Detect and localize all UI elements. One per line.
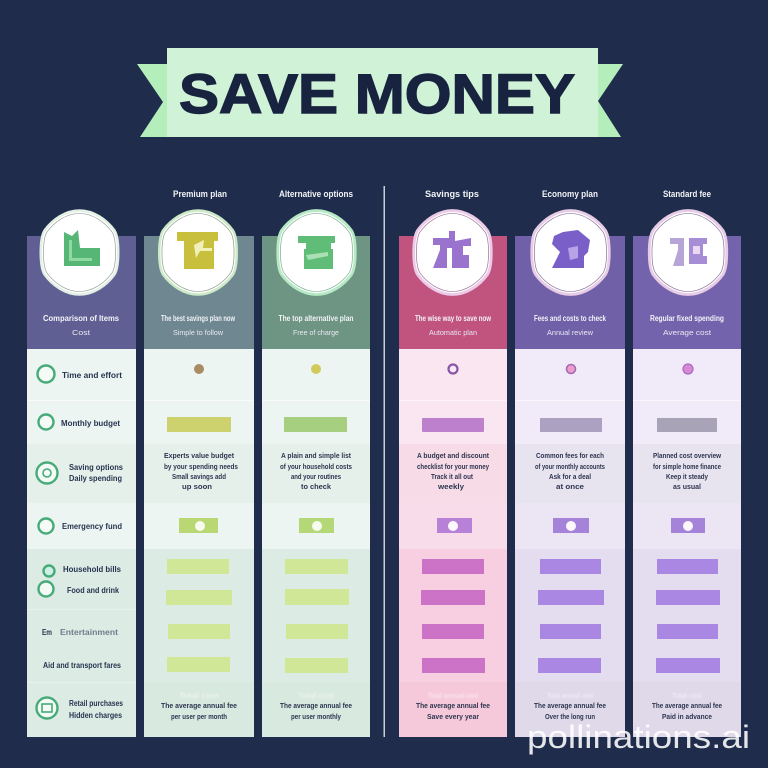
column labels: Alternative options bbox=[279, 189, 353, 199]
description: by your spending needs bbox=[164, 462, 238, 471]
indicator dot bbox=[448, 364, 458, 374]
title: SAVE MONEY bbox=[179, 62, 575, 125]
footer text: per user monthly bbox=[291, 712, 342, 721]
toggle bbox=[671, 518, 705, 533]
row labels: Household bills bbox=[63, 565, 122, 574]
header text: Annual review bbox=[547, 328, 594, 337]
body rows bbox=[515, 349, 625, 737]
footer text bbox=[280, 691, 352, 721]
bars bbox=[656, 559, 720, 673]
description: Track it all out bbox=[431, 472, 473, 481]
description: of your household costs bbox=[280, 462, 352, 471]
footer text bbox=[652, 691, 722, 721]
footer text: The average annual fee bbox=[652, 701, 722, 710]
description: Planned cost overview bbox=[653, 451, 721, 460]
body rows bbox=[633, 349, 741, 737]
description bbox=[535, 451, 605, 491]
toggle bbox=[553, 518, 589, 533]
footer text bbox=[416, 691, 490, 721]
row icons bbox=[36, 366, 58, 718]
header text bbox=[43, 314, 120, 337]
description: A plain and simple list bbox=[281, 451, 351, 460]
indicator dot bbox=[566, 364, 576, 374]
panel: alternatives plan bbox=[262, 210, 370, 737]
bar bbox=[540, 418, 602, 432]
description bbox=[417, 451, 490, 491]
description: A budget and discount bbox=[417, 451, 489, 460]
header text: Free of charge bbox=[293, 328, 339, 337]
description: for simple home finance bbox=[653, 462, 721, 471]
header text: Comparison of Items bbox=[43, 314, 120, 323]
description: up soon bbox=[182, 482, 212, 491]
panel: savings plan bbox=[399, 210, 507, 737]
row labels: Emergency fund bbox=[62, 522, 122, 531]
footer text: Total annual cost bbox=[547, 691, 594, 700]
footer text: The average annual fee bbox=[161, 701, 237, 710]
description: of your monthly accounts bbox=[535, 462, 605, 471]
row labels: Daily spending bbox=[69, 474, 122, 483]
header text: Regular fixed spending bbox=[650, 314, 724, 323]
header bbox=[262, 236, 370, 349]
footer text: The average annual fee bbox=[416, 701, 490, 710]
header bbox=[515, 236, 625, 349]
footer text: Total cost bbox=[179, 691, 220, 700]
header bbox=[144, 236, 254, 349]
toggle bbox=[179, 518, 218, 533]
header text bbox=[415, 314, 492, 337]
row labels: Monthly budget bbox=[61, 419, 120, 428]
indicator dot bbox=[683, 364, 693, 374]
column labels: Savings tips bbox=[425, 189, 479, 199]
header text: The top alternative plan bbox=[278, 314, 354, 323]
footer text: Paid in advance bbox=[662, 712, 712, 721]
footer text: Total cost bbox=[298, 691, 335, 700]
body rows bbox=[399, 349, 507, 737]
header bbox=[399, 236, 507, 349]
header bbox=[27, 236, 136, 349]
row labels: Aid and transport fares bbox=[43, 661, 121, 670]
toggle bbox=[299, 518, 334, 533]
description: Keep it steady bbox=[666, 472, 709, 481]
column labels: Premium plan bbox=[173, 189, 227, 199]
description: at once bbox=[556, 482, 584, 491]
footer text: Save every year bbox=[427, 712, 479, 721]
row labels: Food and drink bbox=[67, 586, 119, 595]
row labels: Saving options bbox=[69, 463, 124, 472]
footer text: per user per month bbox=[171, 712, 227, 721]
bar bbox=[657, 418, 717, 432]
row labels: Time and effort bbox=[62, 371, 122, 380]
badge bbox=[278, 210, 355, 294]
body rows bbox=[27, 349, 136, 737]
row labels bbox=[42, 371, 124, 720]
header text: Average cost bbox=[663, 328, 712, 337]
footer text: Total cost bbox=[672, 691, 703, 700]
header text: The wise way to save now bbox=[415, 314, 492, 323]
row labels: Entertainment bbox=[60, 628, 118, 637]
body rows bbox=[144, 349, 254, 737]
toggle bbox=[437, 518, 472, 533]
panel: features column bbox=[27, 210, 136, 737]
description: checklist for your money bbox=[417, 462, 490, 471]
description: weekly bbox=[437, 482, 465, 491]
bars bbox=[166, 559, 232, 672]
badge bbox=[649, 210, 727, 294]
row labels: Hidden charges bbox=[69, 711, 122, 720]
panel: standard plan bbox=[633, 210, 741, 737]
header text: Cost bbox=[72, 328, 91, 337]
footer text: Total annual cost bbox=[428, 691, 479, 700]
description: Ask for a deal bbox=[549, 472, 591, 481]
badge bbox=[159, 210, 237, 294]
bars bbox=[538, 559, 604, 673]
panel: economy plan bbox=[515, 210, 625, 737]
header bbox=[633, 236, 741, 349]
description: and your routines bbox=[291, 472, 341, 481]
header text bbox=[534, 314, 606, 337]
description: Experts value budget bbox=[164, 451, 234, 460]
footer text bbox=[534, 691, 606, 721]
bar bbox=[284, 417, 347, 432]
header text bbox=[161, 314, 236, 337]
indicator dot bbox=[311, 364, 321, 374]
footer text: Over the long run bbox=[545, 712, 595, 721]
bars bbox=[285, 559, 349, 673]
row labels: Em bbox=[42, 628, 52, 637]
indicator dot bbox=[194, 364, 204, 374]
header text bbox=[650, 314, 724, 337]
footer text: The average annual fee bbox=[534, 701, 606, 710]
description: Common fees for each bbox=[536, 451, 604, 460]
header text: Simple to follow bbox=[173, 328, 224, 337]
body rows bbox=[262, 349, 370, 737]
footer text bbox=[161, 691, 237, 721]
column labels: Standard fee bbox=[663, 189, 711, 199]
row labels: Retail purchases bbox=[69, 699, 123, 708]
column labels: Economy plan bbox=[542, 189, 598, 199]
description bbox=[280, 451, 352, 491]
bar bbox=[167, 417, 231, 432]
description bbox=[164, 451, 238, 491]
bar bbox=[422, 418, 484, 432]
description: to check bbox=[301, 482, 332, 491]
header text: Fees and costs to check bbox=[534, 314, 606, 323]
header text bbox=[278, 314, 354, 337]
description: as usual bbox=[673, 482, 701, 491]
bars bbox=[421, 559, 485, 673]
badge bbox=[532, 210, 609, 294]
title banner bbox=[137, 48, 623, 137]
description bbox=[653, 451, 721, 491]
panel: premium plan bbox=[144, 210, 254, 737]
badge bbox=[414, 210, 491, 294]
header text: The best savings plan now bbox=[161, 314, 236, 323]
watermark: pollinations.ai bbox=[527, 719, 750, 755]
badge bbox=[41, 210, 118, 294]
description: Small savings add bbox=[172, 472, 226, 481]
center divider bbox=[384, 186, 385, 737]
header text: Automatic plan bbox=[429, 328, 477, 337]
footer text: The average annual fee bbox=[280, 701, 352, 710]
column labels bbox=[173, 189, 711, 199]
